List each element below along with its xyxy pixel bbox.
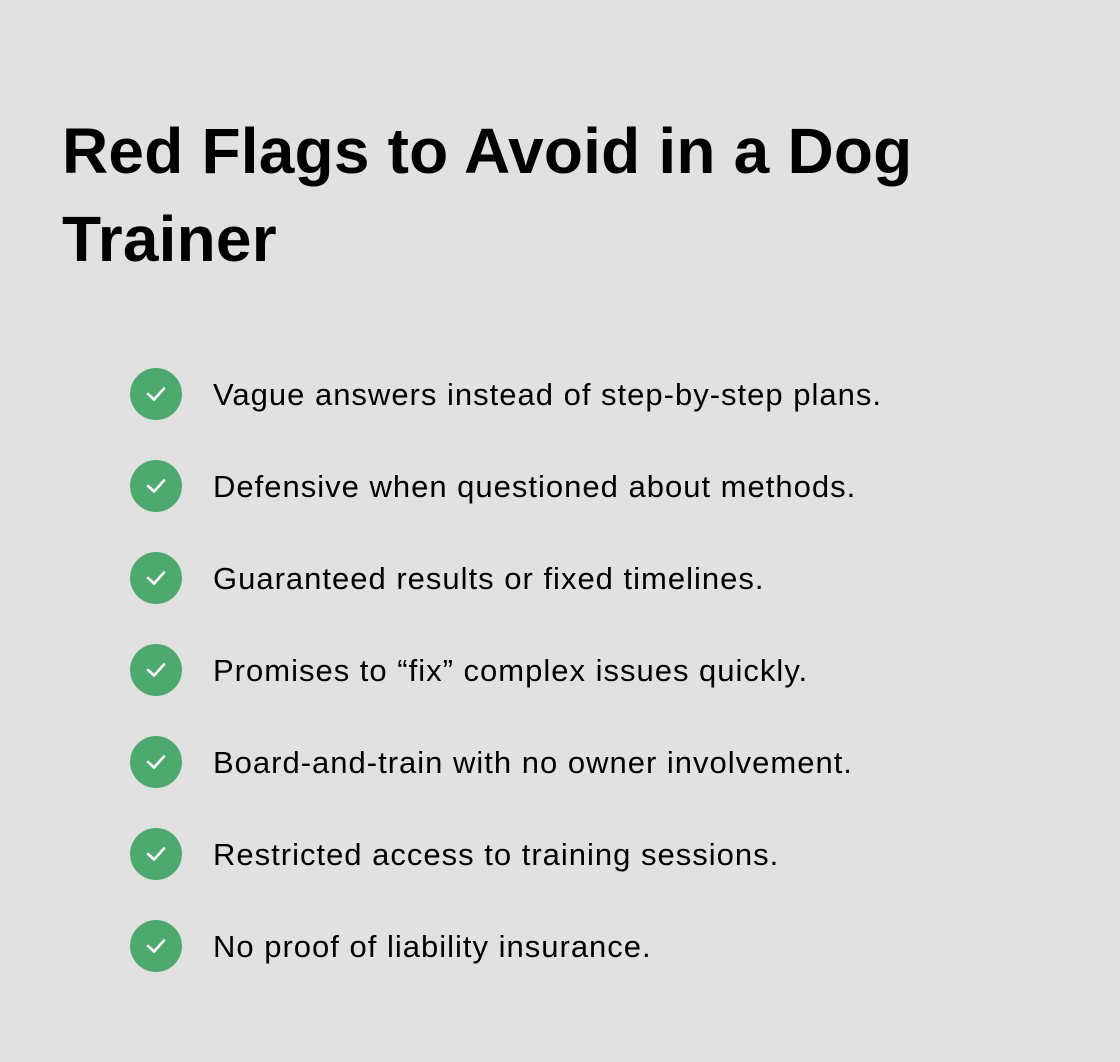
title — [62, 115, 912, 275]
item 2: Defensive when questioned about methods. — [213, 469, 856, 504]
title: Red Flags to Avoid in a Dog — [62, 115, 912, 187]
item 1 — [130, 368, 882, 420]
item 5 — [130, 736, 853, 788]
item 1: Vague answers instead of step-by-step plans. — [213, 377, 882, 412]
item 4 — [130, 644, 808, 696]
item 7 — [130, 920, 652, 972]
title: Trainer — [62, 203, 277, 275]
item 3: Guaranteed results or fixed timelines. — [213, 561, 764, 596]
item 7: No proof of liability insurance. — [213, 929, 652, 964]
item 6: Restricted access to training sessions. — [213, 837, 779, 872]
item 2 — [130, 460, 856, 512]
item 5: Board-and-train with no owner involvement. — [213, 745, 853, 780]
checklist — [130, 368, 882, 972]
item 4: Promises to “fix” complex issues quickly. — [213, 653, 808, 688]
item 3 — [130, 552, 764, 604]
item 6 — [130, 828, 779, 880]
